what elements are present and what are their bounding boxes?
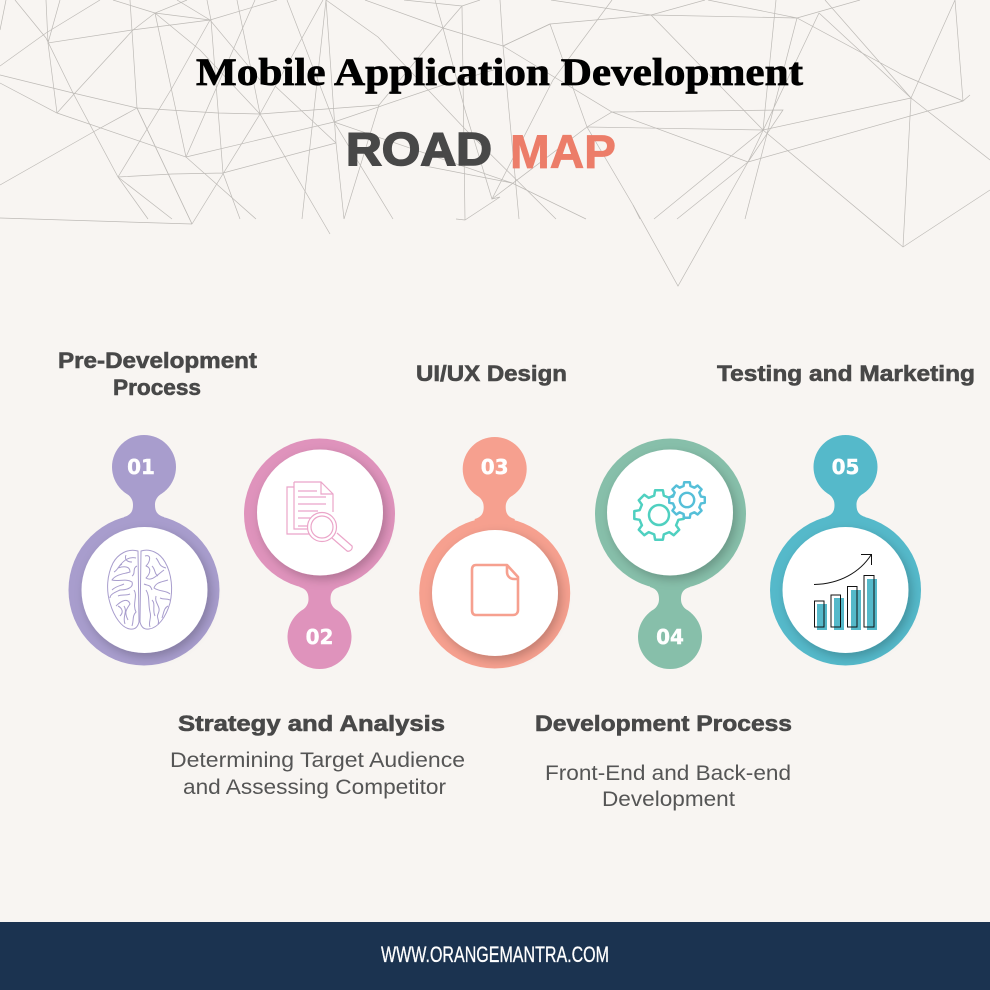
icon: growth bar chart xyxy=(814,554,877,630)
icon: document with magnifier xyxy=(287,482,352,551)
icon: blank file xyxy=(472,565,518,615)
step 05 node xyxy=(770,435,921,666)
step 04 text: Development Process xyxy=(535,711,792,736)
step 02 text: Strategy and Analysis xyxy=(178,711,445,736)
step 01 heading: Process xyxy=(113,375,201,400)
step 04 node xyxy=(595,438,746,669)
step 03 node xyxy=(419,437,570,668)
step 04 node: 04 xyxy=(656,625,684,649)
subtitle: road map: ROAD xyxy=(346,123,492,175)
step 02 text: Determining Target Audience xyxy=(170,749,465,772)
background: polygon line network xyxy=(0,0,990,286)
step 05 heading: Testing and Marketing xyxy=(717,361,975,386)
step 02 text xyxy=(170,711,465,799)
step 04 text: Development xyxy=(602,788,735,811)
step 03 node: 03 xyxy=(481,455,509,479)
footer bar: WWW.ORANGEMANTRA.COM xyxy=(381,942,609,967)
subtitle: road map: MAP xyxy=(510,125,616,178)
step 04 text: Front-End and Back-end xyxy=(545,762,791,785)
step 01 node: 01 xyxy=(127,455,155,479)
step 01 heading: Pre-Development xyxy=(58,348,258,373)
step 04 text xyxy=(535,711,792,811)
step 01 heading xyxy=(58,348,258,400)
subtitle: road map xyxy=(346,123,616,178)
step 03 heading: UI/UX Design xyxy=(416,361,567,386)
title: Mobile Application Development xyxy=(196,51,803,94)
step 01 node xyxy=(68,435,220,666)
footer bar xyxy=(0,922,990,990)
icon: gears xyxy=(634,482,705,540)
step 02 node: 02 xyxy=(306,625,333,649)
step 02 text: and Assessing Competitor xyxy=(183,776,446,799)
step 05 node: 05 xyxy=(832,455,859,479)
step 02 node xyxy=(244,438,395,669)
icon: brain xyxy=(108,550,172,629)
